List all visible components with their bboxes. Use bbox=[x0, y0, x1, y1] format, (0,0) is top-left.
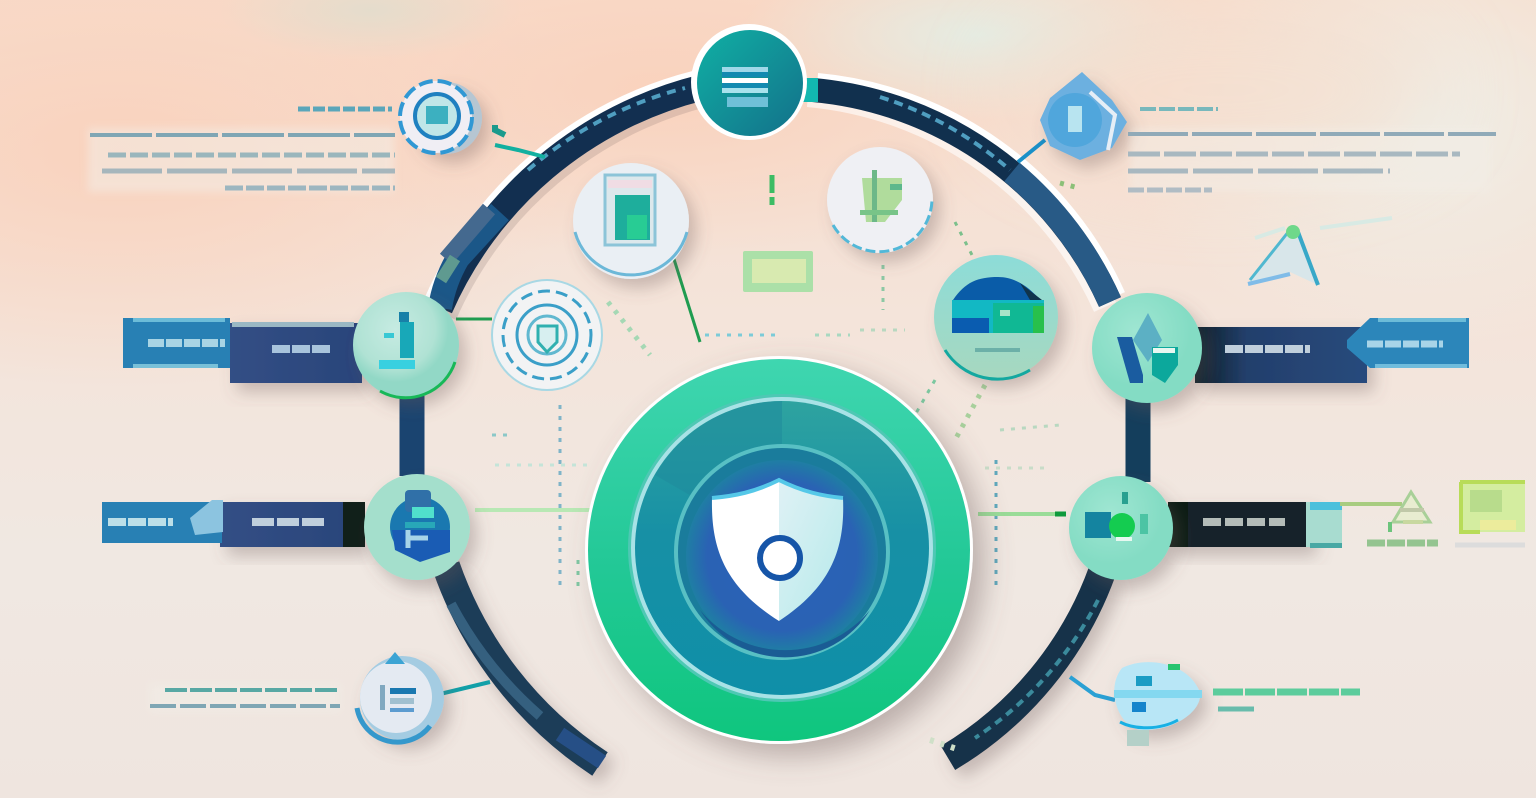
central shield hub bbox=[585, 356, 973, 744]
main ring segments bbox=[412, 83, 1138, 764]
icon: list lines bbox=[722, 67, 768, 107]
ring segment: lower left bbox=[446, 566, 602, 764]
node: upper left bbox=[353, 292, 459, 398]
plant icon circle bbox=[827, 147, 933, 253]
node: top menu bbox=[691, 24, 807, 140]
cluster icon: tower and yellow box bbox=[1340, 482, 1525, 545]
node: top left badge bbox=[400, 81, 505, 154]
node: lower right bbox=[1069, 476, 1173, 580]
outer green ring bbox=[588, 359, 970, 741]
node: upper right bbox=[1092, 293, 1202, 403]
label bar: upper left bbox=[123, 318, 362, 383]
triangle icon bbox=[1248, 218, 1392, 285]
small green card bbox=[743, 251, 813, 292]
text block: top right bbox=[1128, 109, 1496, 192]
label bar: lower left bbox=[102, 500, 365, 547]
label bar: lower right bbox=[1168, 502, 1342, 548]
card icon: white circle left bbox=[573, 163, 689, 279]
solid connector lines bbox=[440, 140, 1115, 700]
card icon: teal circle right bbox=[934, 255, 1058, 379]
node: bottom right badge bbox=[1114, 662, 1202, 746]
ring segment: right vertical bbox=[1126, 398, 1150, 482]
text block: top left bbox=[88, 109, 395, 192]
shield icon bbox=[712, 480, 843, 621]
ring segment: left vertical bbox=[400, 396, 424, 476]
ring segment: top right bbox=[803, 85, 1114, 307]
text block: bottom right bbox=[1213, 692, 1360, 709]
ring segment: top left bbox=[436, 83, 705, 315]
concentric target icon bbox=[492, 280, 602, 390]
node: top right badge bbox=[1040, 72, 1127, 160]
node: lower left bbox=[364, 474, 470, 580]
text block: bottom left bbox=[150, 684, 340, 712]
ring segment: lower right bbox=[948, 572, 1102, 758]
dashed connector network bbox=[492, 183, 1075, 750]
node: bottom left badge bbox=[357, 652, 444, 742]
label bar: upper right bbox=[1195, 318, 1469, 383]
